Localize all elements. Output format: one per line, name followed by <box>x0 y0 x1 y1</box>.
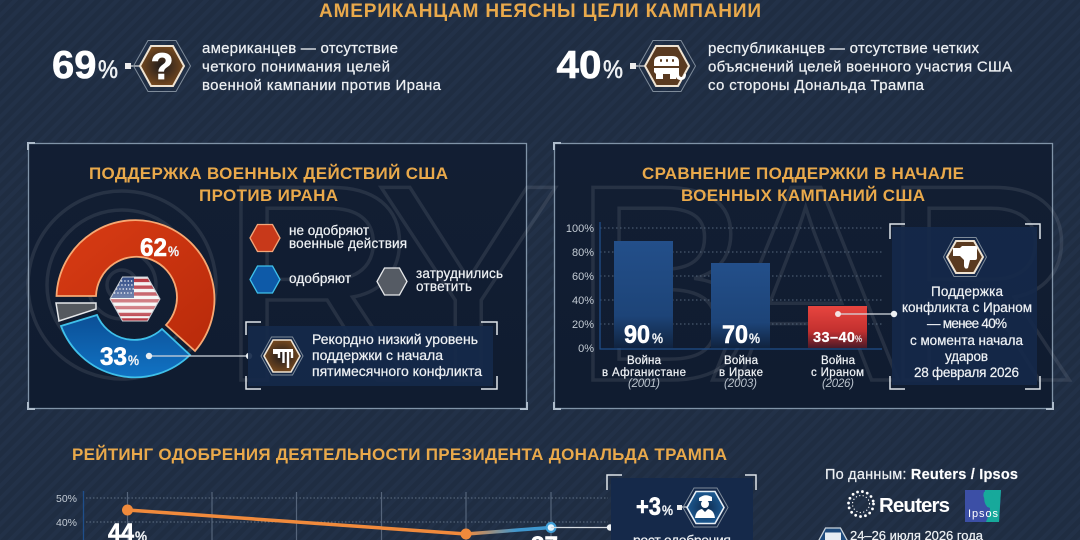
axis labels <box>566 223 594 355</box>
value: 69%: 69 <box>52 44 96 87</box>
panel: support for military action <box>28 143 527 409</box>
stat: 40 percent of Republicans <box>556 40 1012 94</box>
bar: Iraq <box>711 263 770 349</box>
axis labels: 100% <box>566 223 594 235</box>
legend item: undecided: ответить <box>416 279 472 294</box>
legend item: undecided <box>377 266 503 295</box>
axis labels: 40% <box>56 517 77 529</box>
axis labels: 40% <box>572 295 594 307</box>
title: АМЕРИКАНЦАМ НЕЯСНЫ ЦЕЛИ КАМПАНИИ <box>319 1 761 22</box>
text: Americans: американцев — отсутствие <box>202 40 398 57</box>
text: Republicans <box>708 40 1012 94</box>
text: Americans: четкого понимания целей <box>202 58 390 76</box>
axis labels: 80% <box>572 247 594 259</box>
label: Afghanistan: в Афганистане <box>602 367 686 379</box>
value: 69%: % <box>98 56 118 84</box>
icon: elephant hexagon <box>630 40 696 92</box>
legend item: undecided: затруднились <box>416 266 503 281</box>
axis labels <box>56 493 77 529</box>
callout: record low <box>246 322 497 389</box>
bar: Iraq: 70 <box>722 321 748 349</box>
segment: undecided <box>56 303 96 321</box>
segment: 33 percent approve <box>61 315 190 377</box>
bar: Iran: 33–40 <box>813 330 855 346</box>
callout: plus 3 percent <box>607 475 756 540</box>
label: Iraq: Война <box>724 355 759 367</box>
value: 40%: 40 <box>556 44 602 87</box>
data line <box>122 504 556 540</box>
callout text: ударов <box>945 349 988 364</box>
logo: Ipsos: Ipsos <box>968 508 998 520</box>
label: Iran: (2026) <box>822 378 854 390</box>
panel: comparison of support <box>554 143 1053 409</box>
text: Republicans: объяснений целей военного участия США <box>708 58 1012 76</box>
callout text: — менее 40% <box>927 316 1007 331</box>
icon: question mark hexagon: ? <box>151 46 173 87</box>
callout text <box>312 331 482 379</box>
callout text: конфликта с Ираном <box>902 300 1032 315</box>
legend item: disapprove: военные действия <box>289 236 407 251</box>
icon: official hexagon <box>677 488 728 527</box>
bar chart <box>566 222 882 390</box>
stat: 69 percent of Americans <box>52 40 442 94</box>
value: +3%: % <box>662 502 673 518</box>
segment: 62 percent disapprove <box>56 220 214 351</box>
label: Iran <box>811 355 864 390</box>
bar: Iran <box>808 306 867 348</box>
icon: thumbs down hexagon <box>944 238 986 276</box>
line chart <box>56 491 613 540</box>
heading: approval rating: РЕЙТИНГ ОДОБРЕНИЯ ДЕЯТЕЛЬНОСТИ ПРЕЗИДЕНТА ДОНАЛЬДА ТРАМПА <box>72 445 727 464</box>
callout text: 28 февраля 2026 <box>914 365 1019 380</box>
label: 62%: 62 <box>140 234 167 262</box>
bar: Afghanistan <box>614 241 673 349</box>
text: Republicans: республиканцев — отсутствие четких <box>708 40 980 57</box>
icon: US flag hexagon <box>110 277 160 321</box>
connector line <box>835 311 897 317</box>
label: Iran: с Ираном <box>811 367 864 379</box>
axis labels: 50% <box>56 493 77 505</box>
heading: support panel: ПРОТИВ ИРАНА <box>199 186 338 205</box>
label: Iran: Война <box>821 355 856 367</box>
label: Iraq <box>719 355 763 390</box>
source <box>819 467 1018 540</box>
watermark: B <box>570 128 757 440</box>
label: Iraq: (2003) <box>724 378 757 390</box>
value: +3%: +3 <box>636 493 661 521</box>
callout: under 40 percent <box>835 224 1040 389</box>
bar: Afghanistan: % <box>652 330 663 346</box>
text: Americans: военной кампании против Ирана <box>202 77 442 94</box>
callout text: поддержки с начала <box>312 347 443 363</box>
connector line <box>551 524 613 531</box>
logo: Reuters <box>848 492 950 517</box>
heading: comparison panel: СРАВНЕНИЕ ПОДДЕРЖКИ В НАЧАЛЕ <box>642 164 964 183</box>
bar: Iraq: % <box>749 330 760 346</box>
label: Afghanistan: (2001) <box>628 378 660 390</box>
callout text: Рекордно низкий уровень <box>312 331 478 347</box>
label: Afghanistan <box>602 355 686 390</box>
watermark: Y <box>375 128 562 440</box>
axis labels: 0% <box>578 343 594 355</box>
icon: falling bars hexagon <box>261 337 303 375</box>
axis labels: 20% <box>572 319 594 331</box>
axis labels: 60% <box>572 271 594 283</box>
watermark <box>28 128 1080 440</box>
text: Americans <box>202 40 442 94</box>
heading: support panel: ПОДДЕРЖКА ВОЕННЫХ ДЕЙСТВИЙ США <box>89 164 448 183</box>
legend item: approve <box>250 266 351 293</box>
logo: Reuters: Reuters <box>879 494 950 517</box>
label: Iraq: в Ираке <box>719 367 763 379</box>
legend item: disapprove: не одобряют <box>289 223 369 238</box>
watermark: R <box>880 128 1080 440</box>
legend item: approve: одобряют <box>289 271 351 286</box>
logo: Ipsos <box>965 490 1001 522</box>
bar: Iran: % <box>855 334 862 344</box>
icon: calendar hexagon <box>819 528 847 540</box>
callout text: Поддержка <box>931 284 1003 299</box>
source text: По данным: Reuters / Ipsos <box>825 467 1018 483</box>
value: 40%: % <box>603 56 623 84</box>
bar: Afghanistan: 90 <box>624 321 650 349</box>
value: 40% <box>556 44 623 87</box>
value: 69% <box>52 44 118 87</box>
label: Afghanistan: Война <box>627 355 662 367</box>
watermark: R <box>218 128 420 440</box>
label: 33%: % <box>128 352 139 368</box>
text: Republicans: со стороны Дональда Трампа <box>708 77 925 94</box>
heading: support panel <box>89 164 448 205</box>
legend <box>250 223 503 295</box>
callout text: с момента начала <box>910 333 1023 348</box>
label: 33%: 33 <box>100 343 127 371</box>
donut chart <box>56 220 252 377</box>
heading: comparison panel: ВОЕННЫХ КАМПАНИЙ США <box>681 186 925 205</box>
callout text: пятимесячного конфликта <box>312 363 482 379</box>
icon: question mark hexagon <box>125 40 190 92</box>
label: 62%: % <box>168 243 179 259</box>
legend item: disapprove <box>250 223 407 252</box>
callout text <box>902 284 1032 380</box>
watermark: A <box>712 128 900 440</box>
connector line <box>146 353 252 359</box>
heading: comparison panel <box>642 164 964 205</box>
